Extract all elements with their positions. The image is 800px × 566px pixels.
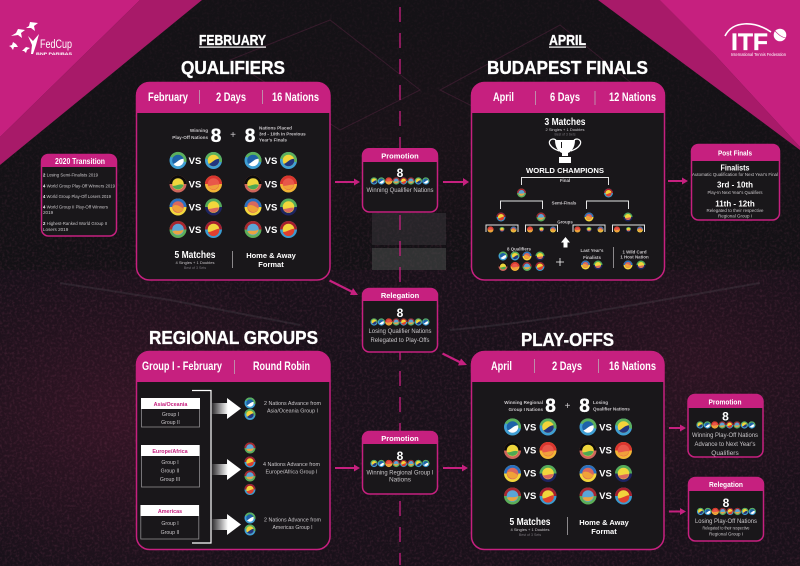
- qualifiers draw right: [244, 152, 297, 238]
- play-offs header facts: April: [491, 359, 512, 373]
- callout: play-off relegation: 8: [723, 496, 730, 510]
- play-offs draw left: VS: [524, 468, 536, 480]
- callout: relegation from qualifiers: Losing Qualifier Nations: [368, 328, 432, 335]
- callout: post finals: Finalists: [720, 162, 750, 172]
- callout: promotion from regional groups: Nations: [389, 476, 412, 484]
- arrow: Americas: [212, 514, 241, 535]
- callout: post finals: Regional Group I: [718, 214, 752, 218]
- play-offs match format: 5 Matches: [510, 517, 551, 528]
- icon: trophy: [549, 139, 581, 163]
- play-offs draw left: [504, 418, 557, 504]
- world champions label: WORLD CHAMPIONS: [526, 168, 604, 175]
- zone: Americas: Americas: [158, 509, 182, 515]
- callout: relegation from qualifiers: [362, 288, 438, 352]
- play-offs match format: Format: [591, 527, 617, 536]
- qualifiers entrants: Year's Finals: [259, 138, 287, 142]
- title: Regional Groups: REGIONAL GROUPS: [149, 328, 318, 348]
- callout: promotion from regional groups: Winning Regional Group I: [366, 470, 434, 476]
- arrow: play-offs to promotion: [669, 424, 686, 432]
- qualifiers entrants: Nations Placed: [259, 126, 292, 130]
- logo: Fed Cup: [9, 22, 73, 56]
- arrow: finals to post finals: [668, 178, 688, 184]
- arrow: Europe/Africa: [212, 459, 241, 480]
- panel: 2020 transition: 2020 Transition: [55, 157, 105, 166]
- nations advancing: Americas: [244, 512, 321, 536]
- zone: Europe/Africa: Group I: [161, 460, 179, 466]
- panel: qualifiers: [136, 82, 330, 280]
- bracket: groups: Groups: [557, 220, 573, 224]
- finals entrants: wild card and host: 1 Wild Card: [622, 250, 647, 254]
- play-offs draw right: VS: [599, 491, 612, 502]
- zone: Americas: [140, 505, 199, 539]
- callout: play-off promotion: [688, 394, 763, 457]
- qualifiers draw left: VS: [189, 156, 201, 167]
- play-offs draw right: VS: [599, 422, 612, 434]
- play-offs draw right: VS: [599, 468, 612, 480]
- arrow: promotion to play-offs: [443, 464, 468, 472]
- callout: promotion from regional groups: [362, 431, 438, 494]
- play-offs entrants: 8: [545, 396, 556, 417]
- bracket: semi-finals: [496, 200, 632, 222]
- play-offs match format: [510, 517, 630, 537]
- logo: ITF: International Tennis Federation: [731, 52, 787, 57]
- finals match format: 3 Matches: [544, 117, 586, 128]
- regional header facts: Group I - February: [142, 359, 222, 373]
- callout: play-off relegation: Losing Play-Off Nations: [695, 518, 758, 525]
- arrow: qualifiers to relegation: [329, 280, 358, 295]
- panel: 2020 transition: 4 World Group Play-Off Losers 2019: [43, 194, 111, 199]
- zone: Asia/Oceania: [141, 398, 200, 427]
- qualifiers match format: Best of 3 Sets: [184, 266, 206, 270]
- qualifiers match format: 5 Matches: [174, 250, 216, 261]
- callout: promotion from regional groups: Promotion: [381, 434, 419, 443]
- zone: Asia/Oceania: Group II: [161, 420, 180, 426]
- qualifiers entrants: +: [230, 130, 236, 141]
- callout: promotion from qualifiers: Promotion: [381, 152, 419, 160]
- arrow: play-offs to relegation: [669, 508, 686, 515]
- nations advancing: Asia/Oceania: 2 Nations Advance from: [264, 401, 321, 407]
- qualifiers entrants: 3rd - 10th in Previous: [259, 132, 306, 136]
- finals header facts: 12 Nations: [609, 90, 656, 104]
- qualifiers draw right: VS: [265, 202, 277, 214]
- callout: promotion from regional groups: 8: [397, 449, 404, 463]
- callout: play-off promotion: Winning Play-Off Nations: [692, 432, 759, 439]
- zone: Americas: Group II: [161, 530, 179, 536]
- nations advancing: Asia/Oceania: [244, 397, 321, 420]
- callout: post finals: 11th - 12th: [715, 200, 755, 208]
- finals match format: [544, 117, 586, 136]
- zone: Americas: Group I: [161, 521, 179, 527]
- play-offs header facts: [491, 359, 656, 373]
- heading: April: APRIL: [549, 32, 586, 49]
- arrow: Asia/Oceania: [212, 398, 241, 419]
- finals entrants: qualifiers: 8 Qualifiers: [507, 246, 532, 252]
- centre dashed divider: [399, 0, 401, 565]
- callout: promotion from qualifiers: 8: [397, 166, 404, 180]
- corner ribbon: top left: [0, 0, 202, 165]
- arrow up: [561, 237, 570, 248]
- callout: play-off promotion: Promotion: [708, 398, 742, 406]
- panel: 2020 transition: 2019: [43, 210, 54, 215]
- arrow: promotion to finals: [443, 178, 469, 186]
- arrow: qualifiers to promotion: [335, 178, 360, 186]
- panel: 2020 transition: Losers 2019: [43, 227, 69, 232]
- callout: play-off relegation: Regional Group I: [709, 532, 743, 536]
- regional header facts: [142, 359, 310, 374]
- qualifiers entrants: 8: [211, 126, 221, 147]
- callout: promotion from qualifiers: [362, 148, 438, 212]
- finals entrants: finalists: Finalists: [583, 255, 601, 260]
- heading: February: FEBRUARY: [199, 32, 266, 49]
- play-offs entrants: Losing: [593, 400, 608, 405]
- play-offs entrants: [504, 396, 630, 417]
- qualifiers entrants: 8: [245, 126, 255, 147]
- zone: Europe/Africa: Group II: [161, 468, 179, 474]
- bracket: all regions: [192, 390, 211, 543]
- callout: post finals: Post Finals: [718, 148, 752, 158]
- nations advancing: Asia/Oceania: Asia/Oceania Group I: [267, 408, 318, 414]
- nations advancing: Europe/Africa: Europe/Africa Group I: [266, 470, 318, 476]
- title: Qualifiers: QUALIFIERS: [181, 58, 285, 78]
- corner ribbon: top right: [598, 0, 800, 150]
- title: Play-Offs: PLAY-OFFS: [521, 330, 614, 350]
- play-offs entrants: Qualifier Nations: [593, 406, 630, 412]
- arrow: relegation to play-offs: [442, 352, 467, 366]
- finals match format: 2 Singles + 1 Doubles: [545, 127, 585, 132]
- callout: post finals: Relegated to their respective: [706, 208, 764, 213]
- finals entrants: finalists: [581, 248, 604, 270]
- play-offs draw left: VS: [524, 491, 536, 502]
- finals match format: Best of 3 Sets: [554, 132, 576, 136]
- nations advancing: Americas: 2 Nations Advance from: [264, 518, 321, 524]
- play-offs entrants: 8: [579, 396, 590, 417]
- qualifiers draw left: VS: [189, 180, 201, 190]
- panel: 2020 transition: [41, 154, 117, 236]
- callout: post finals: Play-In Next Year's Qualifiers: [708, 190, 763, 195]
- finals entrants: wild card and host: [620, 250, 649, 270]
- finals entrants: wild card and host: 1 Host Nation: [620, 254, 649, 260]
- qualifiers entrants: Winning: [190, 128, 208, 133]
- callout: promotion from qualifiers: Winning Qualifier Nations: [366, 187, 434, 194]
- panel: 2020 transition: 4 World Group II Play-Off Winners: [43, 204, 109, 210]
- play-offs entrants: Group I Nations: [509, 407, 543, 412]
- play-offs draw right: VS: [599, 446, 612, 456]
- qualifiers match format: [174, 250, 297, 270]
- nations advancing: Americas: Americas Group I: [272, 525, 313, 531]
- callout: post finals: Automatic Qualification for Next Year's Final: [692, 172, 778, 177]
- bracket: final: Final: [560, 178, 570, 183]
- zone: Europe/Africa: Europe/Africa: [152, 449, 189, 455]
- panel: 2020 transition: 2 Losing Semi-Finalists 2019: [43, 172, 98, 178]
- qualifiers draw right: VS: [265, 225, 277, 236]
- qualifiers draw left: VS: [189, 225, 201, 236]
- zone: Asia/Oceania: Group I: [162, 412, 179, 418]
- logo: ITF: [725, 24, 787, 57]
- play-offs match format: Best of 3 Sets: [519, 533, 541, 537]
- regional header facts: Round Robin: [253, 359, 310, 373]
- finals header facts: April: [493, 90, 514, 104]
- callout: play-off relegation: Relegation: [709, 480, 743, 489]
- bracket: semi-finals: Semi-Finals: [552, 200, 577, 206]
- callout: post finals: [691, 144, 780, 220]
- qualifiers match format: Format: [258, 260, 284, 269]
- panel: Budapest finals: [471, 82, 665, 280]
- callout: play-off promotion: 8: [722, 410, 729, 424]
- qualifiers match format: 4 Singles + 1 Doubles: [175, 260, 215, 265]
- logo: Fed Cup: BNP PARIBAS: [36, 52, 73, 56]
- callout: relegation from qualifiers: 8: [397, 306, 404, 320]
- callout: relegation from qualifiers: Relegation: [381, 291, 420, 300]
- logo: ITF: ITF: [731, 29, 768, 56]
- bracket: groups: [486, 220, 644, 232]
- play-offs draw left: VS: [524, 446, 536, 456]
- zone: Europe/Africa: Group III: [160, 477, 180, 483]
- zone: Europe/Africa: [141, 445, 200, 487]
- panel: 2020 transition: 2 Highest-Ranked World Group II: [43, 221, 107, 226]
- play-offs header facts: 2 Days: [552, 359, 582, 373]
- qualifiers header facts: February: [148, 90, 188, 104]
- plus sign: [556, 258, 564, 266]
- play-offs header facts: 16 Nations: [609, 359, 656, 373]
- panel: regional groups: [136, 351, 330, 550]
- callout: play-off promotion: Qualifiers: [711, 450, 739, 457]
- panel: 2020 transition: 4 World Group Play-Off Winners 2019: [43, 184, 115, 188]
- callout: play-off relegation: Relegated to their respective: [702, 526, 750, 530]
- panel: play-offs: [471, 351, 664, 550]
- nations advancing: Europe/Africa: [244, 442, 320, 495]
- finals entrants: qualifiers: [498, 246, 544, 271]
- play-offs entrants: Winning Regional: [504, 400, 543, 405]
- play-offs match format: 4 Singles + 1 Doubles: [510, 527, 550, 532]
- qualifiers draw left: [170, 152, 222, 238]
- callout: play-off relegation: [688, 477, 764, 541]
- qualifiers entrants: [172, 126, 306, 147]
- bracket: final: [517, 178, 613, 198]
- nations advancing: Europe/Africa: 4 Nations Advance from: [263, 462, 320, 468]
- play-offs match format: Home & Away: [579, 518, 630, 527]
- play-offs entrants: +: [565, 401, 571, 412]
- callout: post finals: 3rd - 10th: [717, 180, 753, 190]
- qualifiers match format: Home & Away: [246, 251, 297, 260]
- play-offs draw left: VS: [524, 422, 536, 434]
- finals header facts: [493, 90, 656, 105]
- callout: relegation from qualifiers: Relegated to Play-Offs: [370, 337, 430, 344]
- logo: Fed Cup: FedCup: [40, 39, 72, 51]
- arrow: regional groups to promotion: [335, 464, 360, 472]
- title: Budapest Finals: BUDAPEST FINALS: [487, 58, 648, 78]
- qualifiers header facts: 2 Days: [216, 90, 246, 104]
- qualifiers draw right: VS: [265, 180, 277, 190]
- qualifiers header facts: 16 Nations: [272, 90, 319, 104]
- finals entrants: finalists: Last Year's: [581, 248, 604, 253]
- qualifiers header facts: [148, 90, 319, 104]
- play-offs draw right: [580, 418, 632, 504]
- qualifiers draw right: VS: [265, 156, 277, 167]
- callout: play-off promotion: Advance to Next Year's: [694, 441, 756, 448]
- zone: Asia/Oceania: Asia/Oceania: [154, 402, 188, 408]
- qualifiers draw left: VS: [189, 202, 201, 214]
- qualifiers entrants: Play-Off Nations: [172, 135, 208, 140]
- finals header facts: 6 Days: [550, 90, 580, 104]
